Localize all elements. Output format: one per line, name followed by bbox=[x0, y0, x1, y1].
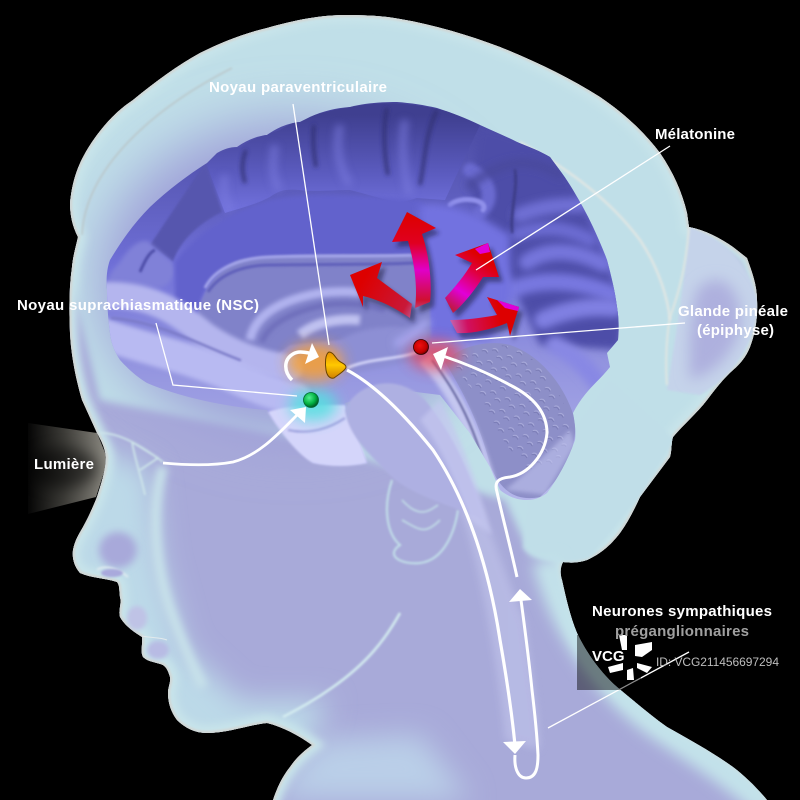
label: Glande pinéale: (épiphyse) bbox=[697, 322, 774, 339]
lips bbox=[127, 606, 169, 659]
watermark: ID: VCG211456697294 bbox=[656, 655, 779, 669]
arrow left bbox=[350, 262, 412, 318]
central bright area behind arrows bbox=[420, 204, 510, 340]
light pathway arrow bbox=[163, 407, 306, 465]
watermark: VCG bbox=[592, 648, 625, 665]
label: Noyau suprachiasmatique: Noyau suprachiasmatique (NSC) bbox=[17, 297, 259, 314]
corpus callosum bbox=[200, 252, 430, 352]
glow: suprachiasmatic nucleus bbox=[289, 389, 337, 421]
nose bbox=[97, 532, 137, 577]
face pale zone bbox=[50, 430, 330, 760]
hair shell inner folds bbox=[520, 142, 670, 320]
arrow upper right bbox=[445, 243, 499, 313]
frontal gyrus bbox=[108, 163, 222, 288]
upper gyri row bbox=[207, 103, 480, 213]
melatonin arrows bbox=[350, 212, 523, 341]
brainstem folds bbox=[425, 358, 488, 480]
brain bbox=[105, 102, 625, 500]
label: Neurones sympathiques préganglionnaires: préganglionnaires bbox=[615, 623, 749, 640]
arrow up bbox=[392, 212, 436, 308]
leader lines bbox=[156, 104, 689, 728]
arrow right bbox=[450, 297, 519, 336]
label: Lumière: Lumière bbox=[34, 456, 94, 473]
pineal gland marker bbox=[414, 340, 428, 354]
pathway to the pineal gland bbox=[433, 347, 547, 577]
neck pale zone bbox=[270, 735, 470, 800]
descending pathway arrow bbox=[347, 370, 526, 754]
cheek line bbox=[156, 467, 203, 687]
ascending pathway loop arrow bbox=[509, 589, 538, 778]
diencephalon bridge bbox=[343, 328, 428, 372]
paraventricular nucleus marker bbox=[325, 352, 346, 378]
label: Neurones sympathiques préganglionnaires bbox=[592, 603, 772, 640]
bun bbox=[666, 227, 757, 395]
curved arrow from SCN to PVN bbox=[286, 343, 319, 380]
brainstem pons body bbox=[345, 383, 492, 535]
neck back glow bbox=[545, 560, 765, 800]
glow: pineal gland bbox=[409, 340, 461, 370]
hair shell bbox=[60, 10, 760, 570]
ear and jaw joint bbox=[387, 480, 458, 563]
label: Glande pinéale: Glande pinéale bbox=[678, 303, 788, 320]
label: Noyau paraventriculaire: Noyau paraventriculaire bbox=[209, 79, 387, 96]
medial frontal area bbox=[174, 195, 420, 313]
watermark bbox=[577, 635, 779, 690]
lower hair lobes bbox=[522, 437, 673, 562]
eye socket bbox=[100, 433, 163, 495]
suprachiasmatic nucleus marker bbox=[304, 392, 318, 408]
label: Glande pinéale bbox=[678, 303, 788, 339]
light beam cone bbox=[26, 423, 108, 514]
dark base of right hemisphere bbox=[470, 125, 625, 350]
spinal column translucent bbox=[462, 512, 539, 747]
arrow shadows bbox=[354, 217, 523, 341]
glow: paraventricular nucleus bbox=[287, 343, 343, 381]
label: Neurones sympathiques préganglionnaires: Neurones sympathiques bbox=[592, 603, 772, 620]
cerebellum bbox=[445, 343, 575, 498]
hair rim line bbox=[82, 68, 232, 235]
jaw line bbox=[283, 613, 400, 717]
temporal lobe bbox=[268, 405, 367, 466]
label: Mélatonine: Mélatonine bbox=[655, 126, 735, 143]
frontal lower lobes bbox=[105, 295, 295, 398]
right gyri bbox=[450, 163, 614, 390]
